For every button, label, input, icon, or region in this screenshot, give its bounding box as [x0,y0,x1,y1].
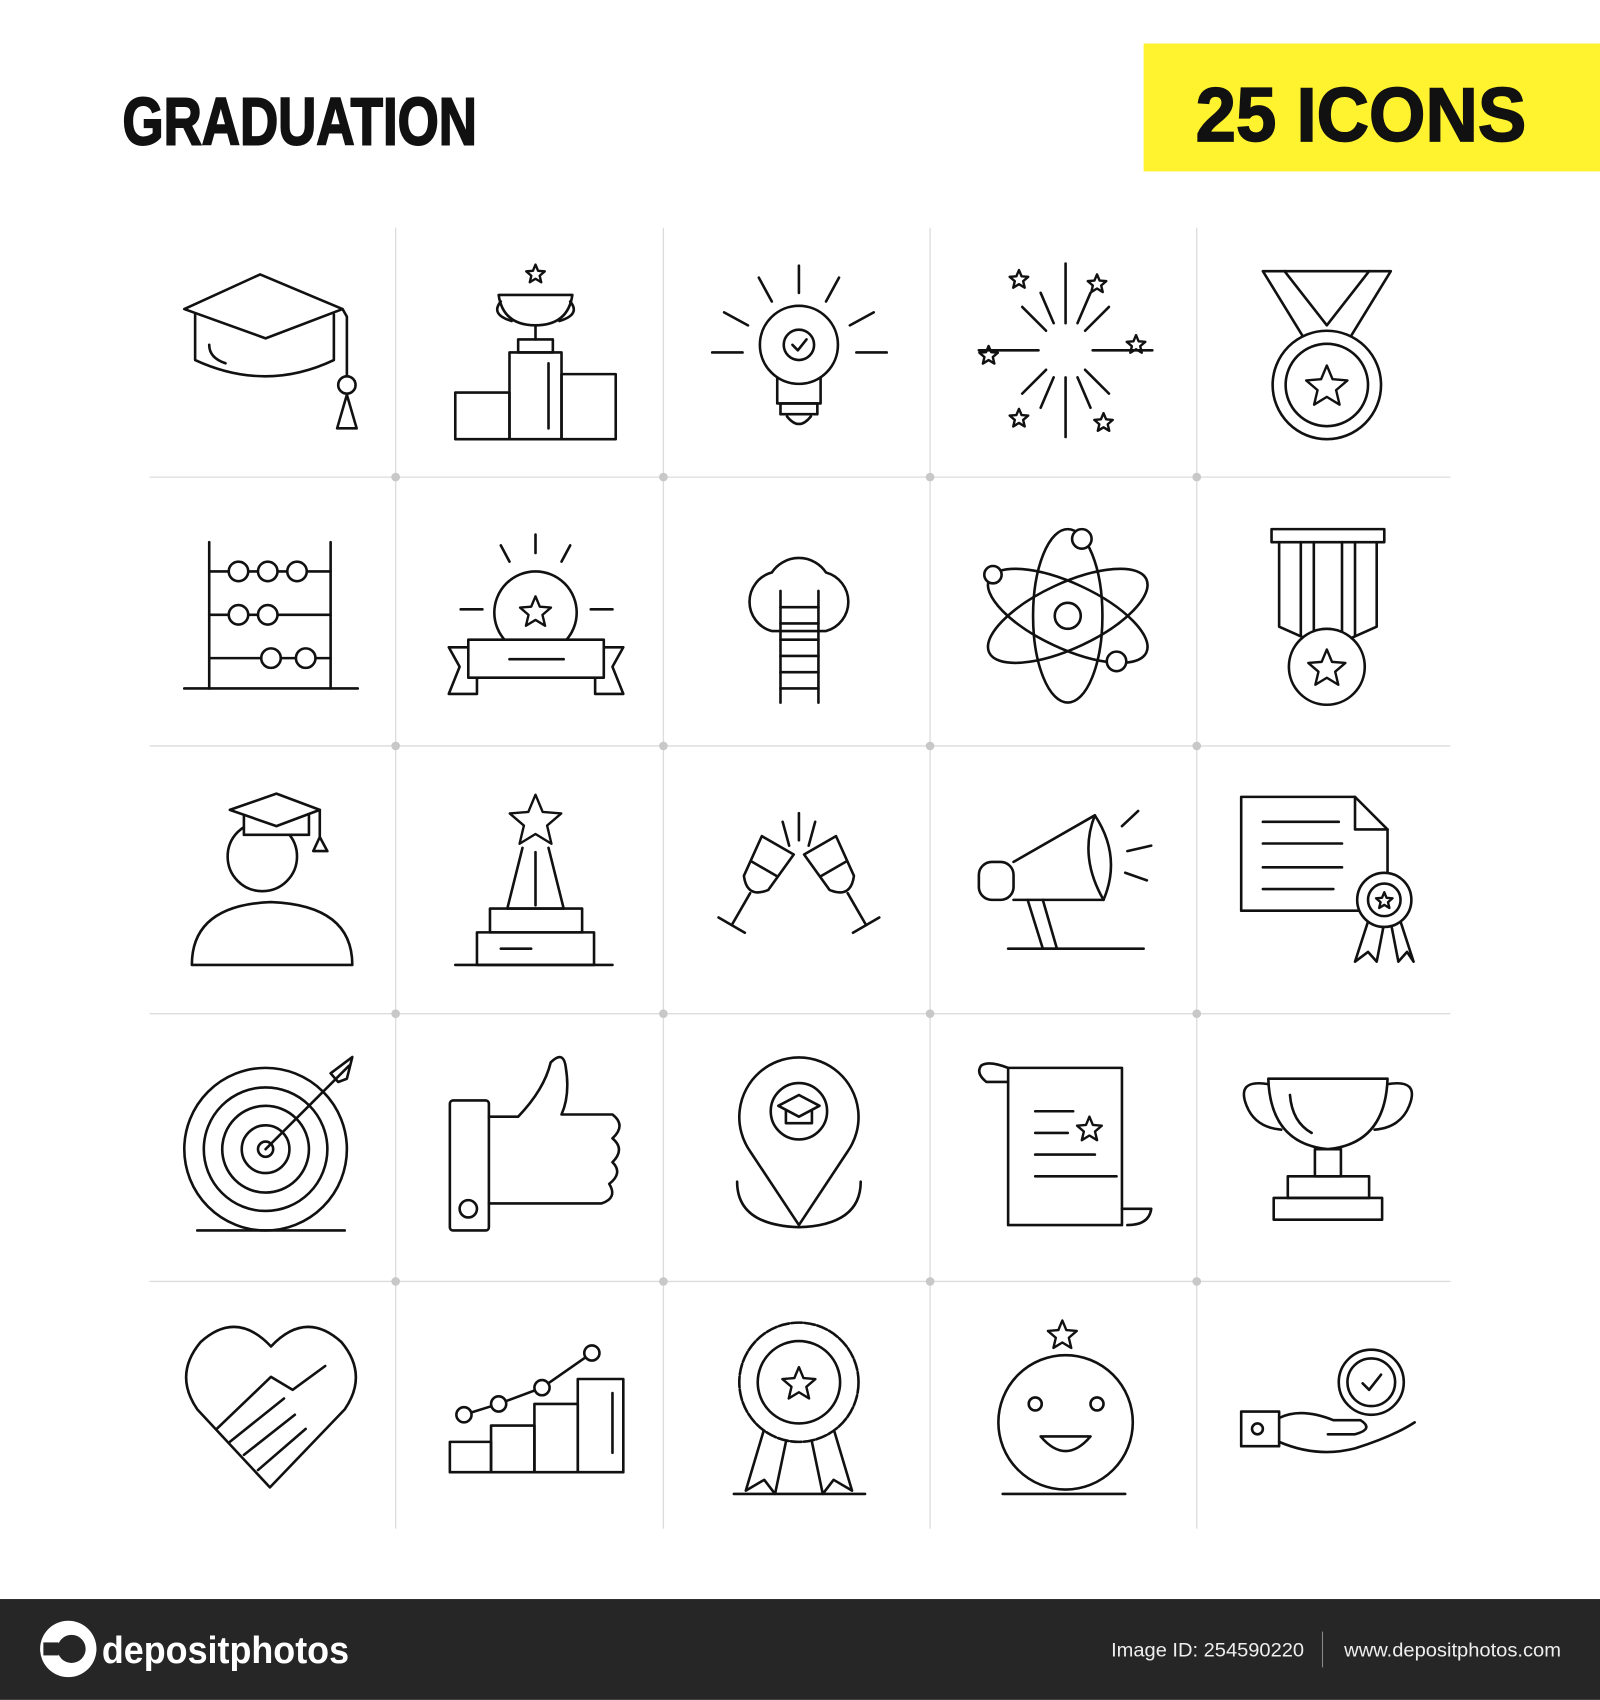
icon: champagne [716,813,882,934]
icon: graduation cap [184,274,357,428]
icon: podium trophy [455,265,616,439]
footer text [1111,1632,1561,1667]
icon grid [184,264,1415,1494]
footer text: Image ID: 254590220 [1111,1640,1304,1662]
icon: star trophy [455,795,612,965]
icon: fireworks [979,264,1152,437]
logo: depositphotos: depositphotos [102,1630,349,1672]
logo: depositphotos [40,1621,349,1677]
icon: graduate [192,794,352,965]
icon: smiley [998,1320,1133,1494]
icon: trophy [1244,1079,1412,1220]
icon: certificate [1241,797,1414,962]
badge: 25 icons [1144,43,1600,171]
icon: medal [1263,271,1391,439]
icon: heart handshake [186,1327,356,1487]
icon: target [184,1057,352,1230]
icon: star banner [449,535,623,694]
icon: growth chart [450,1345,623,1472]
icon: light bulb [712,266,887,424]
icon: location pin [737,1057,861,1227]
icon: atom [975,529,1160,703]
icon: ribbon medal [1272,529,1384,705]
badge: 25 icons: 25 ICONS [1196,73,1526,158]
footer bar [0,1599,1600,1700]
footer text: www.depositphotos.com [1343,1640,1561,1662]
icon: thumbs up [450,1057,620,1230]
icon: rosette [734,1323,865,1494]
icon: megaphone [979,811,1151,949]
icon: scroll [979,1063,1151,1225]
icon: tree ladder [750,558,848,703]
icon: hand coin [1241,1350,1415,1452]
icon: abacus [184,542,358,688]
title: GRADUATION [122,84,477,159]
